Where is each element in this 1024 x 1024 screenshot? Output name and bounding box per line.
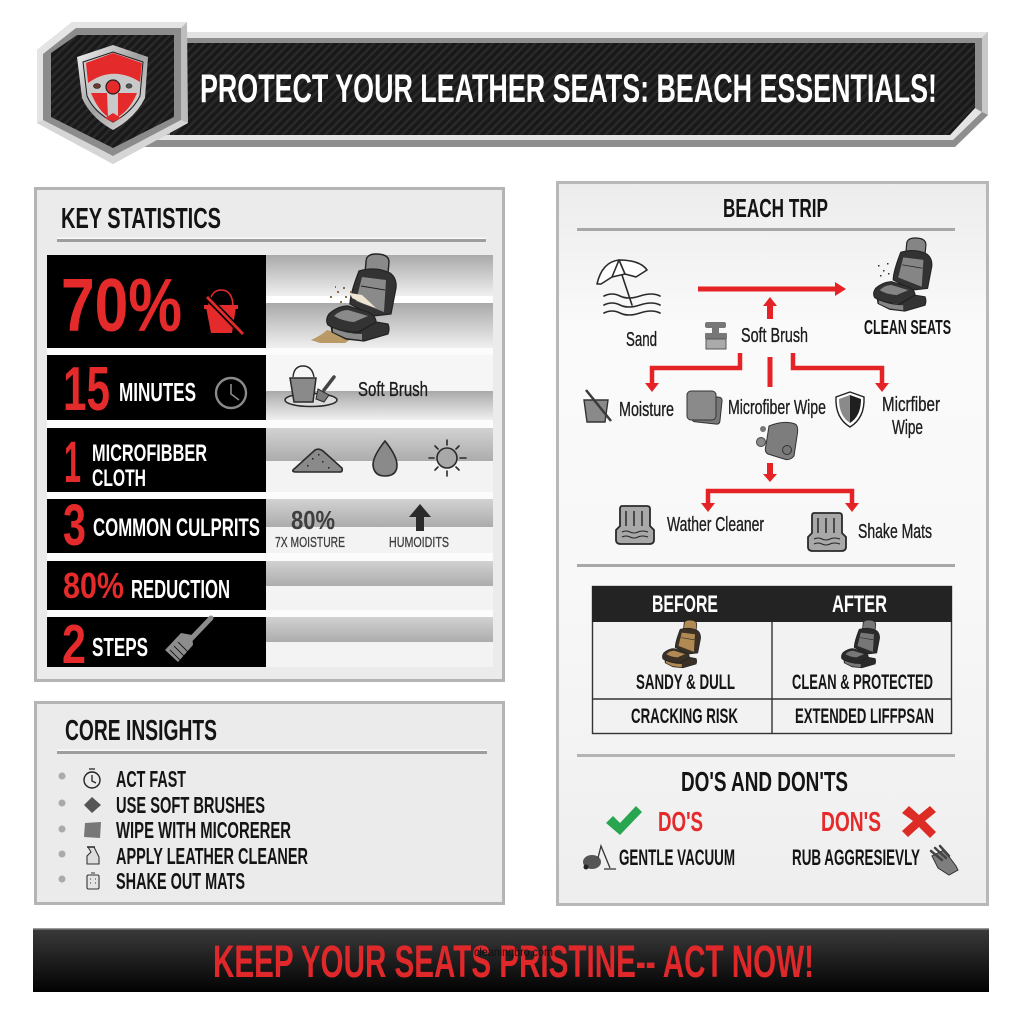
do's and don'ts — [583, 766, 958, 875]
flow diagram: Microfiber Wipe — [728, 397, 826, 419]
stat row: 15 minutes: Soft Brush — [358, 379, 428, 401]
icon: sun — [429, 440, 466, 476]
panel: beach trip — [558, 182, 988, 904]
icon: vacuum — [583, 846, 616, 870]
do's and don'ts: DO'S AND DON'TS — [681, 766, 848, 797]
stat row: 2 steps: 2 — [62, 613, 86, 675]
flow diagram: Micrfiber — [882, 394, 940, 416]
icon: seat with sand — [311, 254, 396, 343]
do's and don'ts: DON'S — [821, 806, 881, 837]
arrow: up from soft brush — [763, 297, 777, 319]
icon: shield — [836, 392, 864, 427]
arrow: branch to moisture — [652, 353, 740, 388]
stat row: 3 common culprits: COMMON CULPRITS — [93, 514, 260, 542]
stat row: 3 common culprits: HUMOIDITS — [389, 534, 449, 551]
stat row: 1 microfiber cloth — [47, 428, 493, 495]
icon: crossed bucket — [204, 290, 243, 334]
stat row: 2 steps: STEPS — [92, 632, 148, 662]
before and after table — [592, 586, 952, 734]
flow diagram: Moisture — [619, 399, 674, 421]
stat row: 3 common culprits: 80% — [291, 505, 335, 535]
flow diagram: Shake Mats — [858, 521, 932, 543]
icon: clean seat — [874, 238, 932, 311]
icon: crossed bucket — [584, 390, 611, 422]
stat row: 2 steps — [47, 613, 493, 675]
stat row: 1 microfiber cloth: MICROFIBBER — [92, 440, 207, 467]
before and after table: SANDY & DULL — [636, 671, 735, 694]
list item: use soft brushes — [58, 792, 265, 818]
stat row: 70% — [47, 254, 493, 348]
stat row: 3 common culprits — [47, 493, 493, 558]
icon: floor mat — [808, 513, 846, 551]
stat row: 15 minutes — [47, 355, 493, 424]
icon: beach umbrella — [597, 260, 660, 315]
stat row: 15 minutes: 15 — [63, 355, 110, 424]
list item: apply leather cleaner — [58, 843, 308, 869]
do's and don'ts: GENTLE VACUUM — [619, 845, 735, 870]
list item: shake out mats — [58, 868, 245, 894]
stat row: 3 common culprits: 3 — [63, 493, 86, 558]
header banner — [130, 32, 988, 147]
icon: sponge with bubbles — [756, 422, 798, 460]
list item: apply leather cleaner: APPLY LEATHER CLEANER — [116, 843, 308, 869]
flow diagram: Soft Brush — [741, 325, 808, 347]
stat row: 3 common culprits: 7X MOISTURE — [275, 534, 345, 551]
icon: check mark — [606, 806, 642, 835]
do's and don'ts: DO'S — [658, 806, 703, 837]
arrow: down from sponge — [763, 463, 777, 482]
list item: wipe with microfiber: WIPE WITH MICORERER — [116, 817, 291, 843]
list item: act fast: ACT FAST — [116, 766, 186, 792]
icon: rubbing hand — [931, 846, 958, 875]
arrow: sand to clean seats — [698, 282, 846, 296]
panel: key statistics — [36, 188, 504, 680]
icon: water drop — [373, 441, 397, 476]
icon: paint brush — [165, 618, 211, 662]
heading: beach trip: BEACH TRIP — [723, 193, 828, 223]
before and after table: AFTER — [832, 591, 887, 618]
list item: use soft brushes: USE SOFT BRUSHES — [116, 792, 265, 818]
before and after table: CRACKING RISK — [631, 705, 738, 728]
arrow: branch to microfiber wipe — [768, 357, 772, 387]
icon: bucket and scoop — [285, 366, 337, 406]
icon: floor mat — [616, 506, 654, 544]
icon: clean seat — [841, 620, 880, 668]
heading: core insights: CORE INSIGHTS — [65, 715, 217, 747]
list item: shake out mats: SHAKE OUT MATS — [116, 868, 245, 894]
stat row: 80% reduction — [47, 561, 493, 610]
icon: clock — [216, 378, 246, 408]
flow diagram — [584, 238, 951, 551]
watermark: cleaningbro.com — [474, 945, 553, 959]
icon: up arrow — [409, 504, 431, 531]
flow diagram: Wipe — [892, 417, 923, 439]
icon: soft brush — [705, 322, 727, 349]
footer banner — [33, 928, 989, 992]
flow diagram: Wather Cleaner — [667, 514, 764, 536]
before and after table: BEFORE — [652, 591, 718, 618]
flow diagram: Sand — [626, 329, 657, 351]
icon: cross mark — [902, 806, 936, 838]
stat row: 1 microfiber cloth: 1 — [64, 430, 81, 495]
list item: act fast — [58, 766, 186, 792]
arrow: split to mats — [708, 491, 852, 509]
before and after table: CLEAN & PROTECTED — [792, 671, 933, 694]
arrow: branch to protect — [793, 353, 882, 388]
stat row: 70%: 70% — [61, 263, 182, 347]
heading: key statistics: KEY STATISTICS — [61, 203, 221, 235]
panel: core insights — [36, 702, 504, 904]
flow diagram: CLEAN SEATS — [864, 317, 951, 339]
stat row: 15 minutes: MINUTES — [119, 377, 196, 407]
stat row: 80% reduction: 80% — [63, 565, 124, 606]
stat row: 1 microfiber cloth: CLOTH — [92, 465, 146, 492]
stat row: 80% reduction: REDUCTION — [131, 574, 230, 604]
icon: sandy seat — [662, 620, 701, 668]
do's and don'ts: RUB AGGRESIEVLY — [792, 845, 920, 870]
icon: shield badge — [37, 22, 188, 164]
list item: wipe with microfiber — [58, 817, 291, 843]
icon: sand pile — [293, 449, 342, 472]
before and after table: EXTENDED LIFFPSAN — [795, 705, 934, 728]
icon: microfiber cloth — [687, 391, 722, 424]
